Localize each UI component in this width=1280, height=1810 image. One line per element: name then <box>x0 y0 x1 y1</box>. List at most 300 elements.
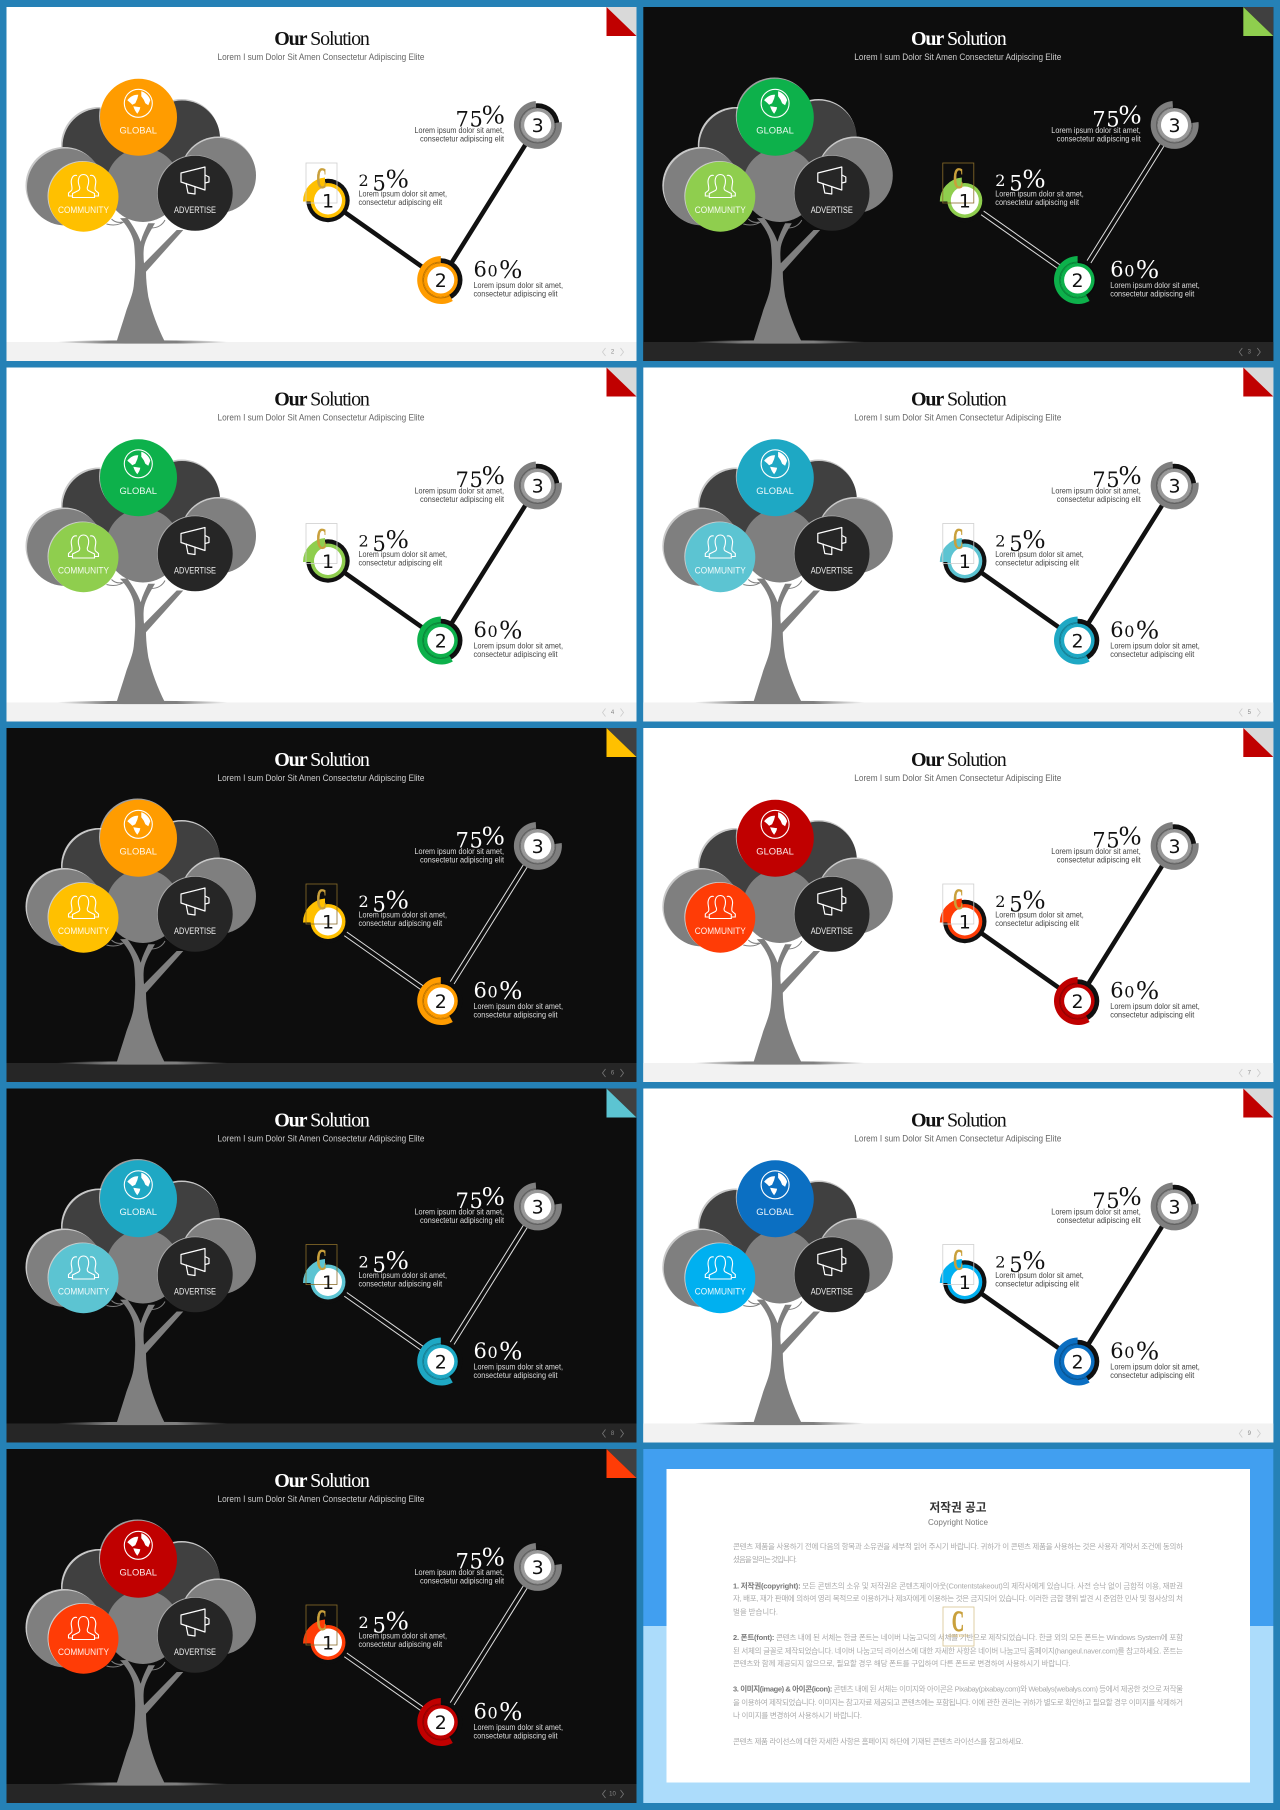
stat 25%: % <box>386 524 408 554</box>
stat 75%: % <box>482 1542 504 1572</box>
stat 60% <box>1110 1336 1200 1380</box>
stat 25% <box>995 163 1084 207</box>
title: Our Solution <box>274 749 370 771</box>
bubble: community <box>684 882 755 953</box>
stat 60%: 6 <box>474 1339 487 1363</box>
slide background <box>643 1088 1273 1442</box>
node 2 <box>417 1698 462 1746</box>
bubble: global <box>99 78 177 156</box>
connector line <box>965 846 1174 1001</box>
node 3: 3 <box>1168 115 1181 137</box>
stat 25%: Lorem ipsum dolor sit amet, <box>358 910 447 919</box>
node 3 <box>514 1182 562 1230</box>
connector line <box>328 125 538 280</box>
stat 25% <box>995 1245 1084 1288</box>
stat 25%: 2 <box>995 171 1005 190</box>
node 1 <box>303 162 350 222</box>
stat 25%: Lorem ipsum dolor sit amet, <box>358 1631 447 1640</box>
bubble: global: GLOBAL <box>120 1568 157 1578</box>
node 1: C <box>953 162 963 195</box>
stat 75%: 5 <box>1106 468 1120 492</box>
stat 60%: consectetur adipiscing elit <box>1110 290 1195 298</box>
stat 75%: % <box>482 100 504 130</box>
stat 25%: consectetur adipiscing elit <box>358 198 443 207</box>
stat 60%: consectetur adipiscing elit <box>1110 650 1195 659</box>
node 3: 3 <box>532 836 544 858</box>
title: Our Solution <box>274 388 370 410</box>
stat 25%: % <box>386 884 408 914</box>
page navigation <box>1239 708 1260 716</box>
tree illustration <box>26 1159 256 1425</box>
stat 25%: 5 <box>1009 172 1023 196</box>
bubble: advertise <box>794 155 870 231</box>
stat 60%: consectetur adipiscing elit <box>474 650 558 659</box>
stat 75%: % <box>1119 820 1141 850</box>
subtitle: Lorem I sum Dolor Sit Amen Consectetur Adipiscing Elite <box>218 1494 424 1504</box>
footer bar <box>643 1063 1273 1082</box>
panel: slide 6 black orange <box>6 728 636 1082</box>
stat 60% <box>474 254 563 298</box>
bubble: community: COMMUNITY <box>695 926 746 937</box>
connector line <box>965 125 1174 280</box>
stat 60%: consectetur adipiscing elit <box>474 1732 558 1740</box>
title: Our Solution <box>274 1110 370 1132</box>
stat 60%: % <box>500 1696 522 1726</box>
node 2: 2 <box>435 1352 447 1374</box>
stat 60%: % <box>500 254 522 284</box>
stat 25%: Lorem ipsum dolor sit amet, <box>995 910 1084 919</box>
stat 25%: consectetur adipiscing elit <box>995 558 1080 568</box>
stat 75% <box>414 1181 505 1225</box>
bubble: community: COMMUNITY <box>695 1286 746 1298</box>
stat 60%: consectetur adipiscing elit <box>474 290 558 298</box>
footer bar <box>6 702 636 722</box>
node 1: C <box>316 162 326 195</box>
node 1: C <box>316 883 326 916</box>
bubble: community: COMMUNITY <box>58 205 110 216</box>
stat 60%: consectetur adipiscing elit <box>1110 1371 1195 1380</box>
bubble: community <box>48 1603 118 1674</box>
corner fold <box>606 728 636 757</box>
bubble: global: GLOBAL <box>120 126 157 136</box>
bubble: community <box>684 1242 755 1313</box>
slide background <box>6 7 636 361</box>
title: Our Solution <box>911 1110 1007 1132</box>
footer bar <box>6 342 636 361</box>
page navigation <box>1239 348 1260 356</box>
node 3 <box>514 822 562 870</box>
slide background <box>6 368 636 722</box>
node 1: C <box>953 883 963 916</box>
stat 60%: 6 <box>474 618 487 642</box>
node 3 <box>514 101 562 149</box>
stat 60%: 0 <box>1124 622 1134 641</box>
stat 60%: Lorem ipsum dolor sit amet, <box>474 1723 563 1732</box>
bubble: advertise: ADVERTISE <box>811 926 853 937</box>
footer bar <box>6 1784 636 1803</box>
bubble: global: GLOBAL <box>120 486 157 497</box>
notice body text: 된 서체의 글꼴로 제작되었습니다. 네이버 나눔고딕 라이선스에 대한 자세한 사항은 네이버 나눔고딕 홈페이지(hangeul.naver.com)를 참고하세요. 폰트는 <box>733 1646 1183 1656</box>
stat 60%: % <box>1136 1336 1159 1366</box>
node 2 <box>1054 1338 1099 1385</box>
connector line <box>328 486 538 640</box>
stat 75% <box>414 100 505 144</box>
node 2 <box>1054 977 1099 1025</box>
stat 75%: % <box>482 1181 504 1211</box>
node 2: 2 <box>435 991 447 1013</box>
node 1: C <box>316 1244 326 1276</box>
tree illustration <box>26 798 256 1065</box>
stat 75%: Lorem ipsum dolor sit amet, <box>414 1208 504 1216</box>
bubble: community <box>48 882 118 953</box>
bubble: global: GLOBAL <box>120 846 157 858</box>
page navigation <box>1239 1069 1260 1077</box>
node 2: 2 <box>435 630 447 652</box>
stat 25%: 5 <box>1009 893 1023 917</box>
stat 25% <box>358 884 447 928</box>
bubble: advertise <box>794 876 870 952</box>
footer bar <box>643 1424 1273 1442</box>
node 1 <box>940 883 986 943</box>
corner fold <box>606 7 636 36</box>
stat 75%: Lorem ipsum dolor sit amet, <box>1051 847 1141 856</box>
stat 60%: % <box>500 975 522 1005</box>
node 2: 2 <box>1072 1352 1084 1374</box>
stat 60% <box>1110 975 1200 1020</box>
stat 25%: Lorem ipsum dolor sit amet, <box>358 1271 447 1280</box>
stat 60%: 0 <box>1124 983 1134 1002</box>
stat 25% <box>358 1245 447 1288</box>
node 1: 1 <box>959 190 971 212</box>
stat 25%: % <box>386 163 408 193</box>
node 1: C <box>953 522 963 556</box>
node 2: 2 <box>1072 630 1084 652</box>
bubble: global <box>736 78 814 156</box>
corner fold <box>606 1088 636 1118</box>
stat 60% <box>474 975 563 1020</box>
stat 25%: consectetur adipiscing elit <box>358 1640 443 1649</box>
page navigation <box>602 348 624 356</box>
node 1: 1 <box>959 912 971 934</box>
watermark badge <box>943 1605 974 1646</box>
stat 60%: 6 <box>1110 618 1124 642</box>
corner fold <box>1243 728 1273 757</box>
notice body text: 나 이미지를 변경하여 사용하시기 바랍니다. <box>733 1710 862 1720</box>
stat 60%: 0 <box>488 1343 498 1362</box>
stat 60%: 0 <box>488 1704 498 1723</box>
stat 75%: 7 <box>1092 828 1106 852</box>
stat 25%: 5 <box>372 1614 386 1638</box>
stat 75%: consectetur adipiscing elit <box>1057 856 1142 865</box>
node 2 <box>1054 616 1099 664</box>
stat 75%: consectetur adipiscing elit <box>1057 135 1142 144</box>
stat 60%: Lorem ipsum dolor sit amet, <box>1110 281 1200 290</box>
stat 75%: % <box>1119 460 1141 490</box>
bubble: global <box>736 798 814 877</box>
stat 60% <box>474 1696 563 1740</box>
node 3 <box>514 462 562 509</box>
stat 60%: 0 <box>1124 262 1134 281</box>
node 1 <box>940 522 986 583</box>
node 2 <box>417 616 462 664</box>
stat 75%: Lorem ipsum dolor sit amet, <box>414 1568 504 1577</box>
stat 60%: Lorem ipsum dolor sit amet, <box>1110 1002 1200 1011</box>
stat 25%: 5 <box>372 532 386 556</box>
stat 60%: 0 <box>488 983 498 1002</box>
panel: slide 3 black green <box>643 7 1273 361</box>
panel: slide 7 white red <box>643 728 1273 1082</box>
bubble: advertise <box>157 155 233 231</box>
stat 75% <box>1051 460 1142 504</box>
subtitle: Lorem I sum Dolor Sit Amen Consectetur Adipiscing Elite <box>854 412 1061 422</box>
bubble: community: COMMUNITY <box>58 926 110 937</box>
stat 25%: Lorem ipsum dolor sit amet, <box>995 1271 1084 1280</box>
title: Our Solution <box>911 388 1007 410</box>
stat 25%: consectetur adipiscing elit <box>995 919 1080 928</box>
stat 75%: % <box>1119 1181 1141 1211</box>
page navigation <box>602 1069 624 1077</box>
stat 75%: % <box>482 460 504 490</box>
stat 75%: 7 <box>1092 108 1106 132</box>
title: Our Solution <box>274 1470 370 1492</box>
bubble: global <box>99 438 177 516</box>
stat 75%: consectetur adipiscing elit <box>420 495 505 504</box>
node 2: 2 <box>1072 991 1084 1013</box>
stat 25%: 2 <box>995 1252 1005 1272</box>
bubble: community <box>684 522 755 592</box>
stat 75%: 5 <box>1106 828 1120 852</box>
footer bar <box>6 1063 636 1082</box>
bubble: community: COMMUNITY <box>58 1286 110 1298</box>
node 1 <box>940 1244 986 1304</box>
stat 25% <box>995 524 1084 568</box>
stat 25%: % <box>1023 524 1045 554</box>
node 2 <box>417 1338 462 1385</box>
stat 25%: 5 <box>1009 1253 1023 1277</box>
stat 60%: 6 <box>1110 979 1124 1003</box>
bubble: global: GLOBAL <box>756 126 794 136</box>
page navigation <box>1239 1430 1260 1438</box>
bubble: global: GLOBAL <box>756 486 794 497</box>
notice body text: 을 이용하여 제작되었습니다. 이미지는 참고자료 제공되고 콘텐츠에는 포함됩니다. 이에 관한 권리는 귀하가 별도로 확인하고 필요할 경우 이미지를 삭제하거 <box>733 1697 1183 1707</box>
background lower band <box>643 1626 1273 1803</box>
stat 60%: 6 <box>1110 1339 1124 1363</box>
corner fold <box>606 368 636 396</box>
stat 60%: % <box>1136 614 1159 644</box>
stat 75%: consectetur adipiscing elit <box>420 135 505 144</box>
corner fold <box>1243 368 1273 396</box>
stat 75%: consectetur adipiscing elit <box>420 1216 505 1225</box>
watermark badge: C <box>952 1605 964 1638</box>
panel: slide 4 white green <box>6 368 636 722</box>
stat 60%: 6 <box>474 979 487 1003</box>
panel: slide 10 black red <box>6 1449 636 1803</box>
connector line <box>965 486 1174 640</box>
bubble: global <box>736 1159 814 1237</box>
page navigation: 10 <box>609 1792 616 1798</box>
tree illustration <box>26 438 256 704</box>
page navigation: 8 <box>611 1431 615 1437</box>
node 3: 3 <box>1168 476 1181 498</box>
notice body text: 콘텐츠 제품 라이선스에 대한 자세한 사항은 홈페이지 하단에 기재된 콘텐츠 라이선스를 참고하세요. <box>733 1736 1024 1746</box>
stat 75%: 7 <box>456 108 469 132</box>
notice body text <box>733 1541 1183 1746</box>
title: Our Solution <box>911 28 1007 50</box>
stat 75%: consectetur adipiscing elit <box>1057 495 1142 504</box>
stat 75%: % <box>1119 100 1141 130</box>
tree illustration <box>662 1159 893 1425</box>
stat 25%: 5 <box>1009 532 1023 556</box>
node 3 <box>1151 462 1199 509</box>
page navigation: 2 <box>611 350 615 356</box>
page navigation <box>602 708 624 716</box>
subtitle: Lorem I sum Dolor Sit Amen Consectetur Adipiscing Elite <box>218 52 424 62</box>
stat 75%: % <box>482 820 504 850</box>
bubble: global: GLOBAL <box>756 1207 794 1218</box>
bubble: community: COMMUNITY <box>695 566 746 576</box>
bubble: advertise: ADVERTISE <box>174 1286 216 1298</box>
stat 75%: Lorem ipsum dolor sit amet, <box>1051 1208 1141 1216</box>
stat 75%: consectetur adipiscing elit <box>1057 1216 1142 1225</box>
stat 25%: 2 <box>995 532 1005 550</box>
node 2 <box>1054 256 1099 304</box>
node 2: 2 <box>435 1712 447 1734</box>
stat 60%: consectetur adipiscing elit <box>474 1371 558 1380</box>
stat 75%: 5 <box>1106 108 1120 132</box>
node 1: 1 <box>959 551 971 573</box>
subtitle: Lorem I sum Dolor Sit Amen Consectetur Adipiscing Elite <box>854 1134 1061 1144</box>
bubble: advertise: ADVERTISE <box>811 205 853 216</box>
connector line <box>328 846 538 1001</box>
stat 60%: % <box>500 1336 522 1366</box>
bubble: advertise: ADVERTISE <box>174 566 216 576</box>
stat 25% <box>995 884 1084 928</box>
page navigation: 3 <box>1248 350 1252 356</box>
notice heading: 저작권 공고 <box>930 1500 986 1514</box>
corner fold <box>1243 1088 1273 1118</box>
bubble: advertise <box>794 1236 870 1312</box>
footer bar <box>6 1424 636 1442</box>
stat 75%: consectetur adipiscing elit <box>420 1577 505 1586</box>
stat 25%: % <box>386 1605 408 1635</box>
stat 75%: 5 <box>470 828 483 852</box>
stat 75%: 5 <box>470 1189 483 1213</box>
node 1 <box>303 883 350 943</box>
stat 60%: 0 <box>488 262 498 281</box>
panel: slide 8 black teal <box>6 1088 636 1442</box>
page navigation <box>602 1430 624 1438</box>
tree illustration <box>662 798 893 1065</box>
stat 75%: consectetur adipiscing elit <box>420 856 505 865</box>
stat 25%: 5 <box>372 893 386 917</box>
node 1: C <box>316 1604 326 1637</box>
stat 25%: Lorem ipsum dolor sit amet, <box>995 189 1084 198</box>
node 2: 2 <box>435 270 447 292</box>
title: Our Solution <box>911 749 1007 771</box>
bubble: community: COMMUNITY <box>58 566 110 576</box>
notice body text: 3. 이미지(image) & 아이콘(icon): 콘텐츠 내에 된 서체는 이미지와 아이콘은 Pixabay(pixabay.com)와 Webalys(webalys.com) 등에서 제공한 것으로 저작물 <box>733 1684 1183 1694</box>
bubble: global <box>99 798 177 877</box>
page navigation <box>602 1790 624 1798</box>
stat 25%: 2 <box>358 892 369 911</box>
notice body text: 1. 저작권(copyright): 모든 콘텐츠의 소유 및 저작권은 콘텐츠제이아웃(Contentstakeout)의 제작사에게 있습니다. 사전 승낙 없이 금합적 이용, 재판권 <box>733 1580 1183 1590</box>
stat 60%: Lorem ipsum dolor sit amet, <box>1110 642 1200 650</box>
node 1: 1 <box>322 551 334 573</box>
stat 75%: 7 <box>456 1550 469 1574</box>
bubble: global <box>736 438 814 516</box>
stat 75%: 7 <box>1092 468 1106 492</box>
title: Our Solution <box>274 28 370 50</box>
slide background <box>6 1449 636 1803</box>
stat 75%: Lorem ipsum dolor sit amet, <box>414 486 504 496</box>
node 2 <box>417 256 462 304</box>
bubble: global <box>99 1520 177 1598</box>
stat 75% <box>1051 100 1142 144</box>
connector line <box>328 1206 538 1362</box>
bubble: community <box>684 161 755 232</box>
bubble: advertise <box>157 1236 233 1312</box>
notice body text: 자, 배포, 재가 판매에 의하여 영리 목적으로 이용하거나 제3자에게 이용하는 것은 금지되어 있습니다. 이러한 금합 행위 발견 시 준엄한 민사 및 형사상의 처 <box>733 1593 1183 1603</box>
stat 25%: 5 <box>372 172 386 196</box>
stat 75% <box>1051 820 1142 865</box>
stat 75% <box>1051 1181 1142 1225</box>
bubble: global: GLOBAL <box>756 846 794 858</box>
stat 25%: consectetur adipiscing elit <box>995 1280 1080 1288</box>
stat 60%: Lorem ipsum dolor sit amet, <box>474 642 563 650</box>
notice body text: 셨음을 알리는 것입니다. <box>733 1554 797 1564</box>
bubble: advertise: ADVERTISE <box>811 1286 853 1298</box>
stat 75%: 5 <box>470 108 483 132</box>
panel: slide 5 white teal <box>643 368 1273 722</box>
notice body text: 콘텐츠와 함께 제공되지 않으므로, 필요할 경우 해당 폰트를 구입하여 다른 폰트로 변경하여 사용하시기 바랍니다. <box>733 1658 1070 1668</box>
stat 75%: 7 <box>1092 1189 1106 1213</box>
corner fold <box>606 1449 636 1478</box>
watermark badge: CONTENTS <box>948 1634 969 1638</box>
node 3 <box>1151 1182 1199 1230</box>
node 3: 3 <box>1168 836 1181 858</box>
stat 60%: 6 <box>1110 258 1124 282</box>
stat 25%: consectetur adipiscing elit <box>358 1280 443 1288</box>
stat 60%: 0 <box>488 622 498 641</box>
stat 75%: 5 <box>1106 1189 1120 1213</box>
stat 60% <box>1110 254 1200 298</box>
stat 25% <box>358 163 447 207</box>
footer bar <box>643 702 1273 722</box>
stat 25%: % <box>1023 884 1045 914</box>
stat 60% <box>474 1336 563 1380</box>
node 3 <box>1151 822 1199 870</box>
bubble: advertise: ADVERTISE <box>174 1647 216 1658</box>
subtitle: Lorem I sum Dolor Sit Amen Consectetur Adipiscing Elite <box>218 773 424 783</box>
stat 25%: 2 <box>358 1252 369 1272</box>
stat 25% <box>358 1605 447 1649</box>
stat 25%: consectetur adipiscing elit <box>358 558 443 568</box>
notice body text: 콘텐츠 제품을 사용하기 전에 다음의 항목과 소유권을 세부적 읽어 주시기 바랍니다. 귀하가 이 콘텐츠 제품을 사용하는 것은 사용자 계약서 조건에 동의하 <box>733 1541 1183 1551</box>
stat 25%: 2 <box>358 532 369 550</box>
bubble: advertise: ADVERTISE <box>174 926 216 937</box>
node 1: C <box>316 522 326 556</box>
connector line <box>328 1567 538 1722</box>
bubble: advertise <box>157 876 233 952</box>
stat 60%: Lorem ipsum dolor sit amet, <box>474 1002 563 1011</box>
stat 60%: % <box>500 614 522 644</box>
stat 25%: 2 <box>995 892 1005 911</box>
stat 75%: Lorem ipsum dolor sit amet, <box>414 126 504 135</box>
node 1 <box>303 1604 350 1664</box>
bubble: community <box>48 522 118 592</box>
stat 75%: Lorem ipsum dolor sit amet, <box>1051 486 1141 496</box>
node 2 <box>417 977 462 1025</box>
